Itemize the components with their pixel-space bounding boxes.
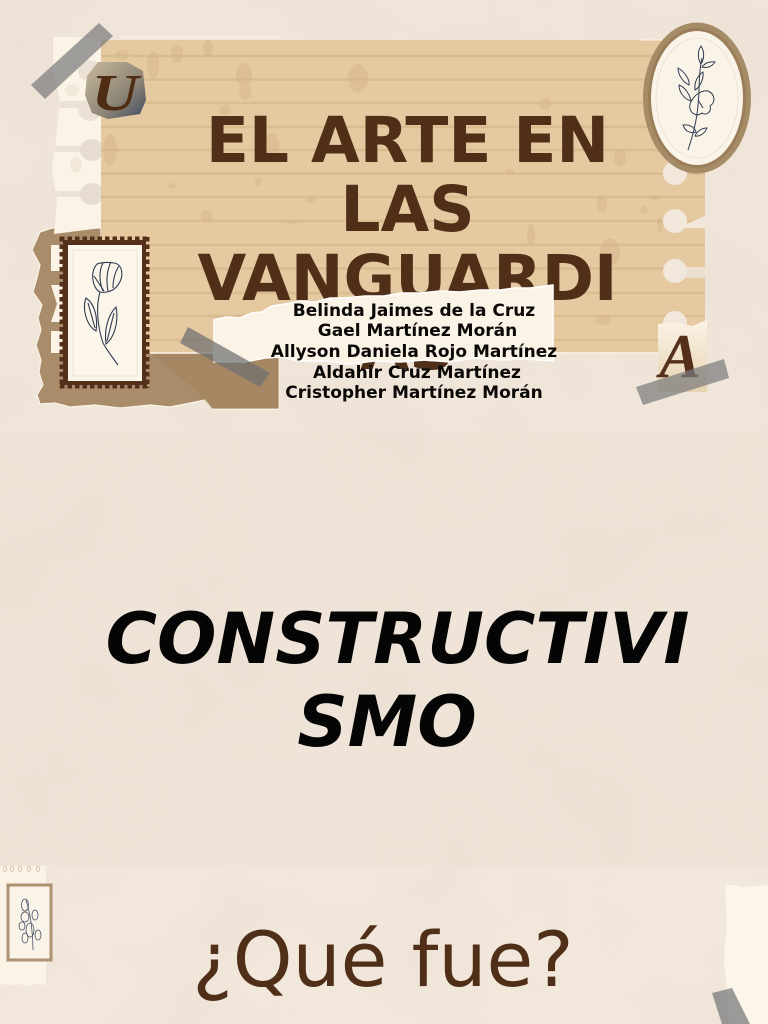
author names — [271, 301, 557, 403]
author names: Cristopher Martínez Morán — [285, 383, 543, 403]
author names: Aldahir Cruz Martínez — [313, 363, 521, 383]
author names: Allyson Daniela Rojo Martínez — [271, 342, 557, 362]
icon: floral branch sketch — [678, 46, 715, 150]
tape: top left — [31, 23, 113, 99]
author names: Gael Martínez Morán — [318, 321, 517, 341]
icon: U badge: U — [92, 64, 142, 121]
heading: constructivismo: SMO — [297, 681, 477, 763]
heading: constructivismo: CONSTRUCTIVI — [106, 598, 689, 680]
heading: constructivismo — [106, 598, 689, 763]
title: AS — [360, 311, 455, 384]
tape: bottom right — [712, 988, 750, 1024]
left note with stamp — [0, 866, 51, 986]
icon: tulip sketch — [84, 262, 122, 365]
panel: lined beige paper — [101, 37, 705, 353]
author names: Belinda Jaimes de la Cruz — [293, 301, 535, 321]
tape: lower centre — [180, 327, 270, 387]
right note — [724, 885, 768, 1024]
torn paper behind names — [214, 285, 553, 364]
heading: ¿Qué fue?: ¿Qué fue? — [192, 915, 574, 1004]
title — [198, 104, 617, 384]
title: EL ARTE EN — [206, 104, 609, 177]
panel: punched holes right edge — [663, 161, 705, 335]
panel: brown torn paper — [32, 228, 279, 409]
icon: sprig sketch — [19, 899, 41, 950]
icon: oval floral frame — [643, 22, 751, 174]
panel: torn notebook strip left — [51, 37, 104, 353]
title: LAS — [340, 173, 475, 246]
stamp with flower — [60, 237, 149, 388]
title: VANGUARDI — [198, 242, 617, 315]
tape: lower right — [636, 359, 729, 405]
icon: blackletter A tile: A — [655, 323, 701, 391]
